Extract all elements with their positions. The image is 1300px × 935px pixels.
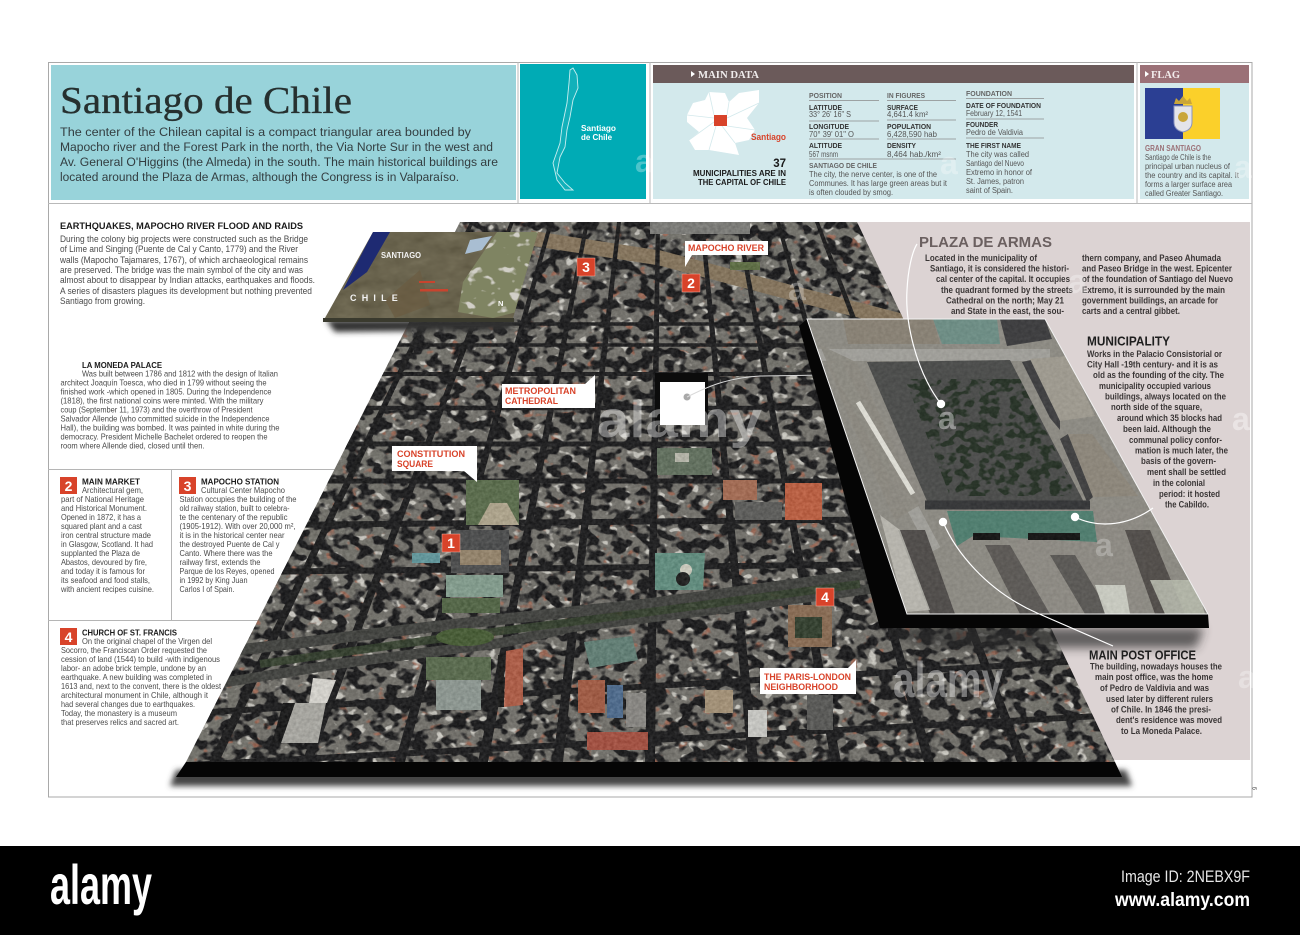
text: Plaza de Armas: the quadrant formed by the streets — [941, 285, 1073, 295]
text: La Moneda Palace: room where Allende died, closed until then. — [60, 440, 204, 450]
watermark overlays: a — [938, 400, 956, 436]
text: Main Market: Architectural gem, — [82, 485, 143, 495]
text: Municipality: mation is much later, the — [1135, 446, 1228, 456]
website: www.alamy.com — [1114, 890, 1250, 911]
icon: flag of Santiago — [1145, 88, 1220, 139]
footer logo: alamy — [50, 853, 152, 916]
building patches — [150, 215, 1150, 770]
data column: foundation — [966, 89, 1044, 195]
plaza square — [867, 360, 1087, 508]
text: Church of St. Francis: architectural monument in Chile, although it — [61, 690, 209, 700]
river — [530, 238, 905, 322]
leader: Municipality — [1071, 508, 1153, 524]
watermark overlays: a — [635, 143, 653, 179]
badge 3: 3 — [184, 478, 192, 494]
streets: north-south — [209, 222, 1027, 762]
text: Municipality: in the colonial — [1153, 478, 1205, 488]
badge 4: 4 — [65, 629, 73, 645]
badge 4 on map: 4 — [821, 589, 829, 605]
watermark overlays: a — [1232, 401, 1250, 437]
data column: foundation: Santiago del Nuevo — [966, 159, 1024, 168]
municipalities map: Santiago — [751, 132, 787, 142]
text: Plaza de Armas: PLAZA DE ARMAS — [919, 235, 1052, 251]
text: La Moneda Palace: LA MONEDA PALACE — [82, 360, 162, 370]
text: Municipality: the Cabildo. — [1165, 500, 1209, 510]
data column: in figures: SURFACE — [887, 103, 918, 112]
flag header bar: FLAG — [1151, 70, 1180, 81]
text: Main Market: MAIN MARKET — [82, 478, 140, 486]
data column: foundation: St. James, patron — [966, 177, 1024, 186]
flag note: GRAN SANTIAGO — [1145, 144, 1201, 153]
callout: Mapocho River — [685, 241, 768, 267]
surrounding roads — [815, 355, 1050, 550]
text: Main Post Office: dent's residence was moved — [1116, 715, 1222, 725]
aerial map base thickness and shadow — [170, 762, 1132, 786]
text: Church of St. Francis: On the original chapel of the Virgen del — [82, 636, 212, 646]
streets: east-west — [190, 324, 1100, 765]
text: Plaza de Armas: and State in the east, the sou- — [951, 306, 1064, 316]
text: Main Market — [60, 477, 154, 594]
map label: Santiago — [581, 123, 616, 133]
text: Plaza de Armas: Extremo, it is surrounded by the main — [1082, 285, 1225, 295]
buildings and parks — [272, 222, 833, 750]
data column: foundation: DATE OF FOUNDATION — [966, 101, 1041, 110]
text: earthquakes: A series of disasters plagues its development but nothing prevented — [60, 286, 312, 297]
main data header bar: MAIN DATA — [698, 70, 759, 81]
text: Church of St. Francis: Socorro, the Franciscan Order requested the — [61, 645, 207, 655]
text: Main Post Office — [1089, 648, 1222, 736]
text: Municipality: old as the founding of the city. The — [1093, 370, 1224, 380]
data column: in figures: 6,428,590 hab — [887, 130, 938, 139]
text: Mapocho Station: Parque de los Reyes, opened — [180, 566, 275, 576]
title intro text: The center of the Chilean capital is a compact triangular area bounded by — [60, 125, 472, 139]
red region marking — [419, 281, 448, 292]
text: La Moneda Palace: Was built between 1786 and 1812 with the design of Italian — [82, 368, 278, 378]
map label Santiago: SANTIAGO — [381, 251, 421, 260]
text: Church of St. Francis: Today, the monastery is a museum — [61, 708, 177, 718]
text: Mapocho Station: in 1992 by King Juan — [180, 575, 248, 585]
text: Church of St. Francis: had several changes due to earthquakes. — [61, 699, 195, 709]
text: Municipality: been laid. Although the — [1123, 424, 1211, 434]
inset: aerial of Plaza de Armas — [800, 315, 1215, 617]
text: Municipality: communal policy confor- — [1129, 435, 1222, 445]
text: Main Market: its seafood and food stalls, — [61, 575, 150, 585]
text: Church of St. Francis: earthquake. A new building was completed in — [61, 672, 212, 682]
watermark overlays: a — [1238, 659, 1256, 695]
data block: Santiago de Chile: is often clouded by smog. — [809, 188, 893, 197]
municipalities note — [693, 158, 786, 187]
municipalities note: MUNICIPALITIES ARE IN — [693, 169, 786, 178]
callout: Constitution Square: SQUARE — [397, 458, 433, 469]
text: Main Post Office: of Pedro de Valdivia and was — [1100, 683, 1209, 693]
text: Municipality: municipality occupied various — [1099, 381, 1211, 391]
text: Mapocho Station: MAPOCHO STATION — [201, 478, 279, 486]
data column: in figures: DENSITY — [887, 141, 916, 150]
data column: foundation: Pedro de Valdivia — [966, 128, 1023, 137]
aerial map of central Santiago — [150, 215, 1150, 770]
data column: position: 33° 26' 16" S — [809, 110, 851, 119]
text: Main Post Office: to La Moneda Palace. — [1121, 726, 1202, 736]
data block: Santiago de Chile: Communes. It has large green areas but it — [809, 179, 948, 188]
data column: position: LATITUDE — [809, 103, 842, 112]
data block: Santiago de Chile: SANTIAGO DE CHILE — [809, 161, 877, 170]
data column: position — [809, 91, 956, 159]
icon: map of Chile — [553, 68, 578, 190]
text: Mapocho Station: Cultural Center Mapocho — [201, 485, 285, 495]
data column: position: 70° 39' 01" O — [809, 130, 854, 139]
panel: flag — [1140, 65, 1249, 199]
watermark overlays — [597, 143, 1256, 708]
data column: in figures: IN FIGURES — [887, 91, 925, 100]
text: Church of St. Francis: labor- an adobe brick temple, undone by an — [61, 663, 206, 673]
badge 4 on map — [816, 588, 834, 606]
image id: Image ID: 2NEBX9F — [1121, 867, 1250, 886]
footer bar — [0, 846, 1300, 935]
left white building — [820, 345, 920, 520]
text: Main Market: iron central structure made — [61, 530, 151, 540]
page number: 9 — [1253, 786, 1259, 790]
text: Municipality: period: it hosted — [1159, 489, 1220, 499]
text: Plaza de Armas: of the foundation of Santiago del Nuevo — [1082, 274, 1233, 284]
text: Plaza de Armas: Cathedral on the north; May 21 — [946, 296, 1064, 306]
panel: Plaza de Armas background — [800, 222, 1250, 760]
lower gray blocks — [898, 530, 955, 614]
post office green building — [947, 511, 1097, 546]
text: Church of St. Francis: cession of land (1544) to build -with indigenous — [61, 654, 220, 664]
watermark overlays: a — [788, 271, 806, 307]
text: earthquakes: Santiago from growing. — [60, 296, 145, 307]
text: Plaza de Armas: cal center of the capital. It occupies — [936, 274, 1070, 284]
text: Plaza de Armas: government buildings, an arcade for — [1082, 296, 1218, 306]
text: Municipality: ment shall be settled — [1147, 467, 1226, 477]
text: La Moneda Palace: Salvador Allende (who committed suicide in the Independence — [60, 414, 270, 424]
municipalities note: 37 — [773, 158, 786, 170]
bottom road — [925, 500, 1090, 510]
text: Plaza de Armas: Located in the municipality of — [925, 253, 1038, 263]
map label Chile: CHILE — [350, 293, 403, 303]
text: Main Market: in Glasgow, Scotland. It had — [61, 539, 153, 549]
title heading: Santiago de Chile — [60, 80, 352, 122]
box dividers — [48, 470, 335, 620]
text: La Moneda Palace: architect Joaquín Toesca, who died in 1799 without seeing the — [60, 378, 267, 388]
data block: Santiago de Chile — [809, 161, 948, 197]
text: Municipality: basis of the govern- — [1141, 456, 1216, 466]
panel: main data — [653, 65, 1134, 199]
badge 2 on map: 2 — [687, 275, 695, 291]
header dividers — [48, 62, 1252, 204]
text: earthquakes: During the colony big projects were constructed such as the Bridge — [60, 234, 308, 245]
watermark overlays: a — [940, 145, 958, 181]
data column: foundation: Extremo in honor of — [966, 168, 1033, 177]
flag note: forms a larger surface area — [1145, 180, 1232, 189]
data column: foundation: THE FIRST NAME — [966, 141, 1021, 150]
data column: foundation: The city was called — [966, 150, 1029, 159]
watermark overlays: a — [1095, 527, 1113, 563]
data column: position: LONGITUDE — [809, 122, 849, 131]
plaza trees — [907, 379, 1072, 496]
text: earthquakes: almost about to disappear by Indian attacks, earthquakes and floods. — [60, 275, 315, 286]
callout: Constitution Square: CONSTITUTION — [397, 448, 465, 459]
image grain — [150, 215, 1150, 770]
badge 3 on map: 3 — [582, 259, 590, 275]
inset relief map of Chile — [320, 228, 542, 322]
text: Main Market: and today it is famous for — [61, 566, 145, 576]
callout: Metropolitan Cathedral — [502, 375, 595, 408]
text: Mapocho Station: te the centenary of the republic — [180, 512, 288, 522]
leader line from cut-out — [687, 375, 826, 397]
text: Mapocho Station: it is in the historical center near — [180, 530, 285, 540]
text: Mapocho Station: railway first, extends the — [180, 557, 261, 567]
flag note: principal urban nucleus of — [1145, 162, 1231, 171]
callout: Paris-London: NEIGHBORHOOD — [764, 681, 838, 692]
text: Plaza de Armas — [919, 235, 1233, 316]
badge 3 on map — [577, 258, 595, 276]
data column: in figures — [887, 91, 956, 159]
flag note: the country and its capital. It — [1145, 171, 1240, 180]
text: Main Post Office: used later by different rulers — [1106, 694, 1213, 704]
municipalities note: THE CAPITAL OF CHILE — [698, 178, 786, 187]
text: earthquakes: are preserved. The bridge was the main symbol of the city and was — [60, 265, 303, 276]
leader: Main Post Office — [939, 518, 1113, 646]
text: La Moneda Palace: finished work -which opened in 1805. During the Independence — [60, 386, 272, 396]
data column: foundation: February 12, 1541 — [966, 109, 1022, 118]
leader: Plaza de Armas — [907, 244, 945, 408]
text: La Moneda Palace: (1818), the first national coins were minted. With the military — [60, 396, 264, 406]
data column: foundation: saint of Spain. — [966, 186, 1013, 195]
title intro text — [60, 125, 498, 184]
flag note: called Greater Santiago. — [1145, 189, 1223, 198]
panel: locator map of Chile — [520, 64, 646, 199]
text: Main Market: squared plant and a cast — [61, 521, 143, 531]
callout: Paris-London: THE PARIS-LONDON — [764, 671, 851, 682]
text: Municipality: around which 35 blocks had — [1117, 413, 1222, 423]
data column: in figures: 8,464 hab./km² — [887, 150, 941, 159]
main data header bar — [653, 65, 1134, 83]
text: Municipality: north side of the square, — [1111, 402, 1202, 412]
flag note: Santiago de Chile is the — [1145, 153, 1211, 162]
text: Municipality: Works in the Palacio Consistorial or — [1087, 349, 1222, 359]
inset grain — [800, 315, 1215, 617]
inset shadow on page — [885, 628, 1204, 648]
data column: position: 567 msnm — [809, 150, 838, 159]
text: Main Post Office: The building, nowadays houses the — [1090, 662, 1222, 672]
badge 2 on map — [682, 274, 700, 292]
text: Main Market: with ancient recipes cuisine. — [60, 584, 154, 594]
watermark overlays: alamy — [893, 652, 1003, 708]
text: Plaza de Armas: Santiago, it is considered the histori- — [930, 264, 1069, 274]
callout: Metropolitan Cathedral: CATHEDRAL — [505, 395, 558, 406]
text: Main Market: Abastos, devoured by fire, — [61, 557, 147, 567]
callout: Paris-London — [760, 660, 856, 694]
text: Main Post Office: main post office, was the home — [1095, 672, 1213, 682]
callout: Metropolitan Cathedral: METROPOLITAN — [505, 385, 576, 396]
text: Mapocho Station: Station occupies the building of the — [180, 494, 297, 504]
text: Main Market: and Historical Monument. — [61, 503, 147, 513]
text: Church of St. Francis: CHURCH OF ST. FRANCIS — [82, 628, 177, 638]
text: Plaza de Armas: thern company, and Paseo Ahumada — [1082, 253, 1222, 263]
text: Municipality: City Hall -19th century- and it is as — [1087, 360, 1218, 370]
map label: de Chile — [581, 132, 612, 142]
text: Municipality — [1087, 334, 1228, 510]
title intro text: located around the Plaza de Armas, although the Congress is in Valparaíso. — [60, 170, 459, 184]
data column: foundation: FOUNDATION — [966, 89, 1012, 98]
page frame — [48, 62, 1252, 797]
text: Church of St. Francis: that preserves relics and sacred art. — [61, 717, 179, 727]
Alameda avenue — [224, 569, 871, 688]
watermark overlays: alamy — [597, 391, 762, 449]
text: Municipality: MUNICIPALITY — [1087, 334, 1171, 348]
callout: Constitution Square — [392, 446, 477, 482]
text: Plaza de Armas: carts and a central gibbet. — [1082, 306, 1180, 316]
inset base black thickness — [799, 319, 1209, 628]
Plaza de Armas cut-out in map — [655, 373, 708, 425]
text: Main Market: Opened in 1872, it has a — [61, 512, 141, 522]
text: La Moneda Palace — [60, 360, 280, 450]
text: earthquakes: EARTHQUAKES, MAPOCHO RIVER FLOOD AND RAIDS — [60, 221, 303, 232]
text: La Moneda Palace: democracy. President Michelle Bachelet ordered to reopen the — [60, 432, 268, 442]
badge 2: 2 — [65, 478, 73, 494]
text: Mapocho Station: Carlos I of Spain. — [180, 584, 234, 594]
flag note — [1145, 144, 1240, 198]
data column: foundation: FOUNDER — [966, 120, 998, 129]
map label — [581, 123, 616, 142]
text: Mapocho Station — [179, 477, 297, 594]
callout: Mapocho River: MAPOCHO RIVER — [688, 242, 764, 253]
text: earthquakes: walls (Mapocho Tajamares, 1767), of which archaeological remains — [59, 255, 308, 266]
text: Mapocho Station: old railway station, built to celebra- — [180, 503, 290, 513]
badge 4 — [60, 628, 77, 645]
badge 1: 1 — [447, 535, 455, 551]
text: Municipality: buildings, always located on the — [1105, 392, 1226, 402]
text: Mapocho Station: the destroyed Puente de Cal y — [180, 539, 280, 549]
data block: Santiago de Chile: The city, the nerve center, is one of the — [809, 170, 938, 179]
watermark overlays: a — [1068, 263, 1088, 301]
data column: in figures: POPULATION — [887, 122, 931, 131]
text: La Moneda Palace: coup (September 11, 1973) and the overthrow of President — [60, 404, 253, 414]
data column: position: POSITION — [809, 91, 842, 100]
watermark overlays: a — [1234, 149, 1252, 185]
badge 1 — [442, 534, 460, 552]
panel: title — [51, 65, 516, 200]
north marker: N — [498, 299, 503, 308]
text: earthquakes: of Lime and Singing (Puente de Cal y Canto, 1779) and the River — [60, 244, 299, 255]
text: Plaza de Armas: and Paseo Bridge in the west. Epicenter — [1082, 264, 1232, 274]
text: Main Post Office: MAIN POST OFFICE — [1089, 648, 1196, 662]
text: Church of St. Francis: 1613 and, next to the convent, there is the oldest — [61, 681, 222, 691]
text: Mapocho Station: (1905-1912). With over 20,000 m², — [180, 521, 296, 531]
text: La Moneda Palace: Hall), the building was bombed. It was painted in white during the — [60, 422, 280, 432]
data column: position: ALTITUDE — [809, 141, 842, 150]
municipalities map — [687, 90, 787, 155]
text: Main Market: part of National Heritage — [61, 494, 144, 504]
text: Main Market: supplanted the Plaza de — [61, 548, 140, 558]
title intro text: Av. General O'Higgins (the Almeda) in the south. The main historical buildings are — [60, 155, 498, 169]
text: Church of St. Francis — [60, 628, 222, 727]
text: Mapocho Station: Canto. Where there was the — [180, 548, 273, 558]
data column: in figures: 4,641.4 km² — [887, 110, 928, 119]
title intro text: Mapocho river and the Forest Park in the north, the Via Norte Sur in the west and — [60, 140, 493, 154]
right buildings — [1022, 360, 1060, 430]
text: Main Post Office: of Chile. In 1846 the presi- — [1111, 704, 1211, 714]
text: earthquakes — [59, 221, 315, 307]
inset relief map shadow — [326, 320, 513, 332]
